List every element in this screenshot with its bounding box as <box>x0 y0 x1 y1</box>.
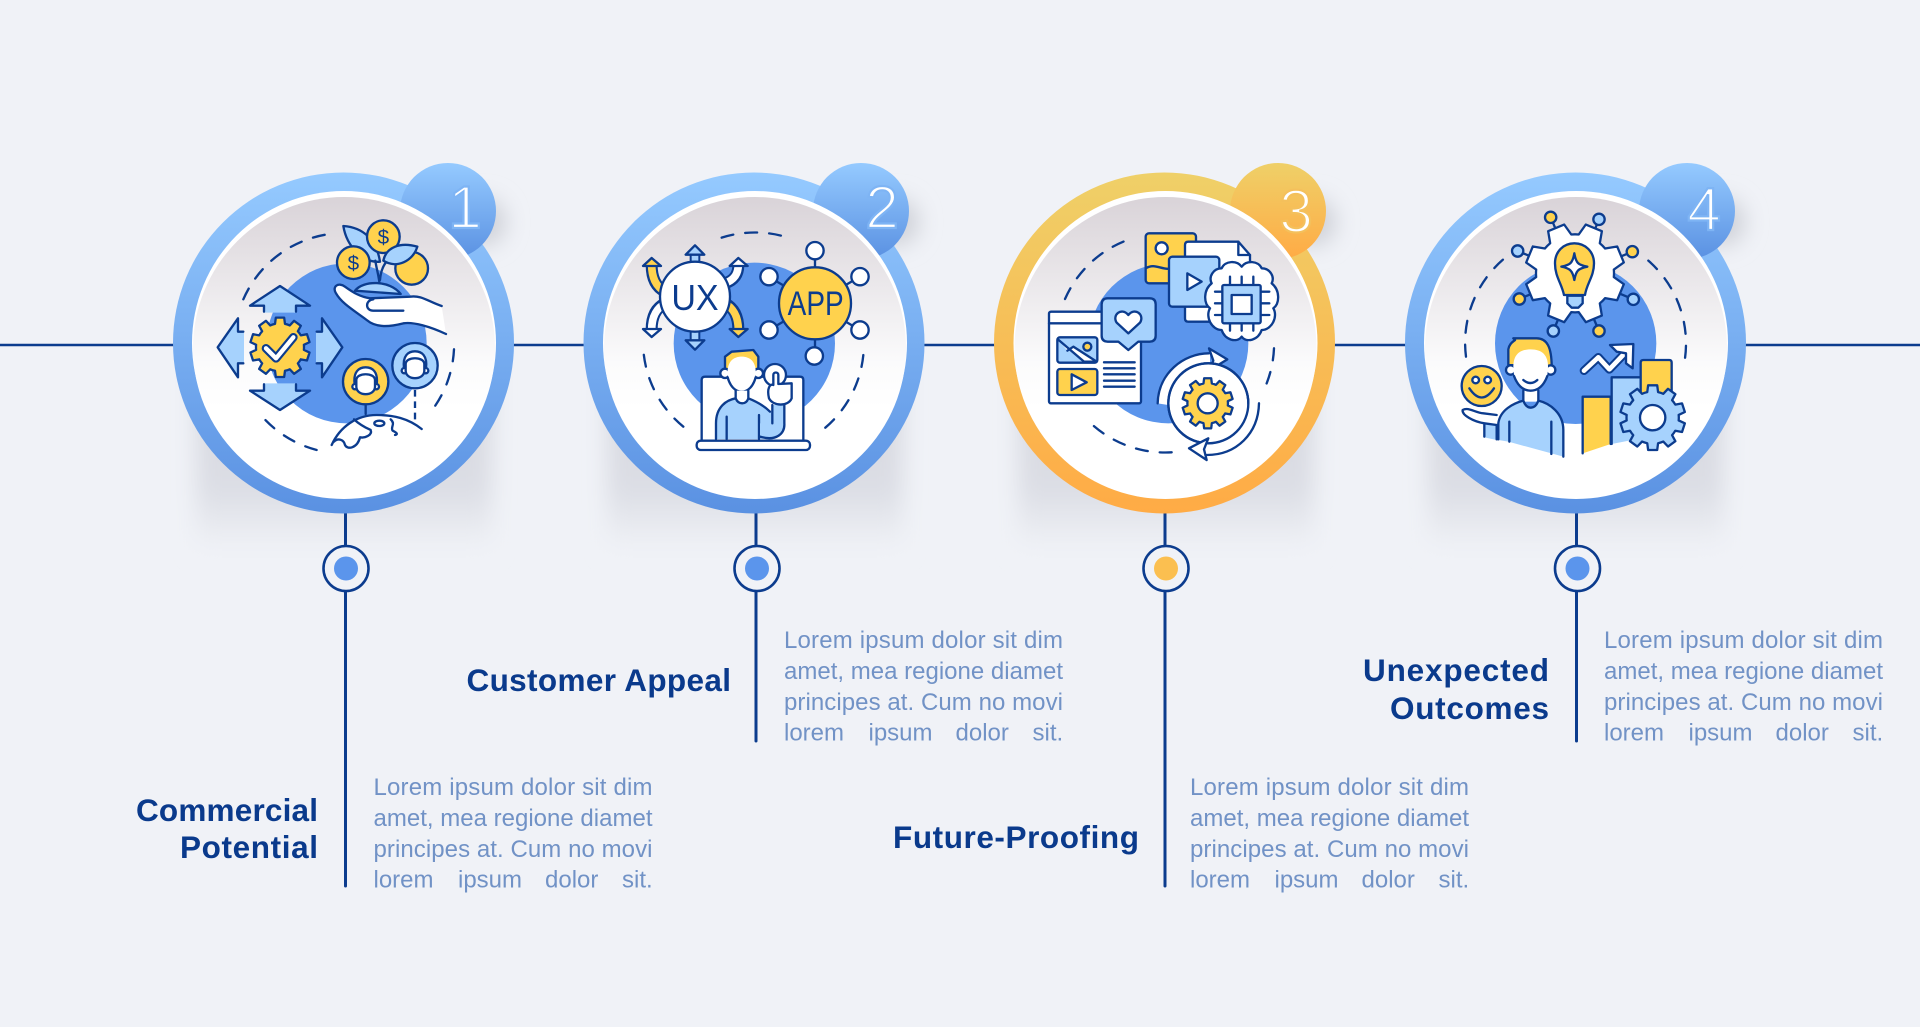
body text 3: ipsum <box>1274 866 1339 894</box>
body text 4: lorem <box>1604 720 1664 746</box>
icon: commercial potential <box>218 220 454 450</box>
cycle gear <box>1158 348 1259 460</box>
dashed orbit <box>643 232 863 431</box>
people pins <box>343 343 438 429</box>
title 4: Outcomes <box>1390 690 1549 726</box>
step 3 panel <box>893 163 1469 894</box>
inner circle 4 <box>1424 191 1728 499</box>
body text 3: lorem <box>1190 866 1250 894</box>
marker 2 <box>734 546 780 591</box>
trend arrow <box>1584 344 1633 371</box>
marker 3 <box>1144 546 1188 591</box>
body text 3: principes at. Cum no movi <box>1190 836 1469 863</box>
dashed orbit <box>1065 239 1274 453</box>
inner circle 3 <box>1014 191 1318 499</box>
body text 3: Lorem ipsum dolor sit dim <box>1190 774 1469 801</box>
body text 1 <box>374 774 653 894</box>
web page <box>1049 312 1141 403</box>
badge 1 <box>400 163 496 259</box>
body text 2 <box>784 627 1063 746</box>
bar chart <box>1583 360 1672 453</box>
smiling person <box>1463 338 1563 457</box>
body text 2: Lorem ipsum dolor sit dim <box>784 627 1063 654</box>
arrows around gear <box>218 286 342 410</box>
ring 4 <box>1405 172 1746 514</box>
body text 2: sit. <box>1032 720 1063 746</box>
gear with check <box>250 318 310 377</box>
plant with coins: $ <box>378 226 390 249</box>
body text 3: amet, mea regione diamet <box>1190 805 1469 832</box>
step 2 panel <box>466 163 1063 746</box>
body text 1: principes at. Cum no movi <box>374 836 652 863</box>
body text 2: principes at. Cum no movi <box>784 689 1063 716</box>
hand <box>335 285 446 334</box>
gear on chart <box>1620 385 1685 450</box>
dashed orbit <box>1465 259 1686 358</box>
body text 4: principes at. Cum no movi <box>1604 689 1883 716</box>
UX arrows <box>643 245 748 350</box>
connector 1 <box>344 513 347 886</box>
body text 2: lorem <box>784 720 844 746</box>
APP network <box>760 242 869 365</box>
horizontal timeline <box>0 344 1920 346</box>
plant with coins <box>337 220 428 294</box>
body text 1: amet, mea regione diamet <box>374 805 653 832</box>
idea gear <box>1511 209 1639 338</box>
body text 4: sit. <box>1852 720 1883 746</box>
body text 3: dolor <box>1362 866 1415 894</box>
badge 4 <box>1639 163 1735 259</box>
dashed orbit <box>243 234 454 450</box>
body text 4: Lorem ipsum dolor sit dim <box>1604 627 1883 654</box>
brain chip <box>1205 262 1278 340</box>
marker 1 <box>324 546 368 591</box>
laptop presenter <box>697 350 810 450</box>
inner circle 2 <box>603 191 907 499</box>
body text 4: dolor <box>1776 720 1829 746</box>
globe <box>332 415 422 448</box>
icon: customer appeal <box>643 232 869 450</box>
body text 3 <box>1190 774 1469 894</box>
title 1 <box>136 792 318 865</box>
ring 3 <box>994 172 1335 514</box>
APP network: APP <box>788 285 844 323</box>
body text 4 <box>1604 627 1883 746</box>
body text 4: ipsum <box>1688 720 1753 746</box>
body text 2: amet, mea regione diamet <box>784 658 1063 685</box>
smiley <box>1462 366 1502 406</box>
ring 1 <box>173 172 514 514</box>
circle shadows <box>196 198 1745 550</box>
media stack <box>1146 233 1250 322</box>
step 1 panel <box>136 163 653 894</box>
icon: unexpected outcomes <box>1462 209 1686 457</box>
step 4 panel <box>1363 163 1883 746</box>
inner circle 1 <box>192 191 496 499</box>
title 1: Commercial <box>136 792 318 828</box>
title 1: Potential <box>180 829 318 865</box>
body text 1: ipsum <box>458 866 522 894</box>
title 4 <box>1363 652 1549 726</box>
UX circle: UX <box>671 277 719 318</box>
title 3: Future-Proofing <box>893 819 1139 855</box>
plant with coins: $ <box>348 252 360 275</box>
body text 3: sit. <box>1438 866 1469 894</box>
connector 3 <box>1164 513 1166 886</box>
heart bubble <box>1102 298 1156 350</box>
icon: future proofing <box>1049 233 1278 460</box>
body text 1: sit. <box>622 866 653 894</box>
connector 2 <box>754 513 758 741</box>
body text 1: Lorem ipsum dolor sit dim <box>374 774 652 801</box>
connector 4 <box>1575 513 1578 741</box>
body text 2: dolor <box>956 720 1009 746</box>
body text 2: ipsum <box>868 720 933 746</box>
number 3: 3 <box>1279 178 1313 245</box>
number 1: 1 <box>448 174 482 241</box>
body text 1: dolor <box>545 866 598 894</box>
body text 4: amet, mea regione diamet <box>1604 658 1883 685</box>
badge 2 <box>813 163 909 259</box>
title 2: Customer Appeal <box>466 662 731 698</box>
marker 4 <box>1555 546 1600 591</box>
title 4: Unexpected <box>1363 652 1549 688</box>
number 2: 2 <box>865 174 899 241</box>
body text 1: lorem <box>374 866 434 894</box>
number 4: 4 <box>1687 176 1721 243</box>
UX circle <box>660 262 730 332</box>
badge 3 <box>1230 163 1326 259</box>
ring 2 <box>584 172 924 514</box>
